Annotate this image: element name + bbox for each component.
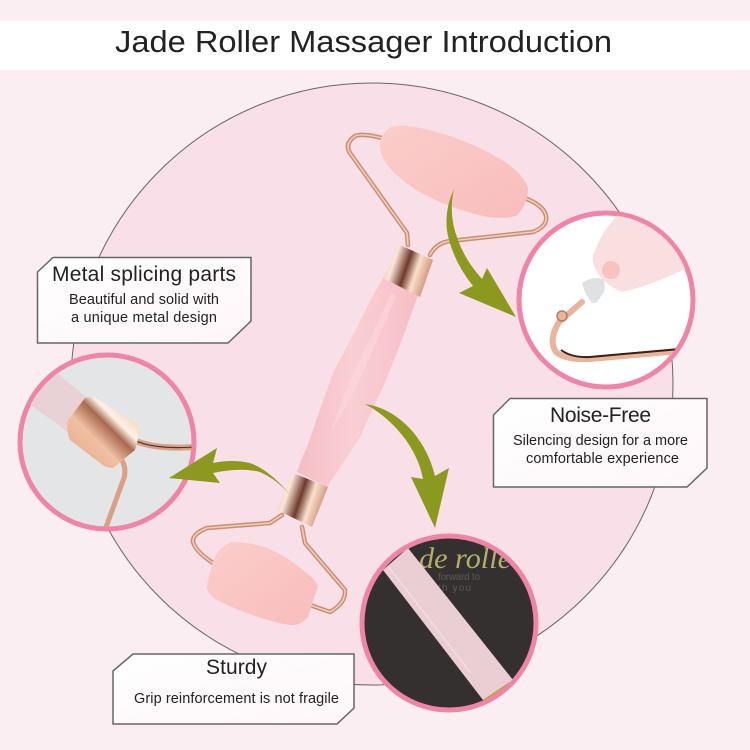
detail circle: sturdy handle: th you xyxy=(438,583,471,594)
detail circle: sturdy handle xyxy=(362,536,536,710)
jade tip xyxy=(592,216,685,292)
top wire frame xyxy=(348,135,546,255)
wire xyxy=(553,302,680,359)
bottom wire frame xyxy=(193,515,345,612)
callout: sturdy: Sturdy xyxy=(206,656,268,679)
roller product xyxy=(193,126,546,625)
silicone spacer xyxy=(582,278,605,303)
arrow: noise-free xyxy=(446,189,516,317)
arrow: sturdy xyxy=(365,404,449,528)
wire lower xyxy=(105,453,125,530)
top collar xyxy=(383,245,433,297)
collar xyxy=(67,397,139,468)
callout: noise-free xyxy=(494,398,707,487)
title band: Jade Roller Massager Introduction xyxy=(115,24,612,59)
spring clip xyxy=(557,311,567,321)
callout: noise-free: Noise-Free xyxy=(550,404,651,427)
background circle xyxy=(71,83,673,685)
callout: noise-free: Silencing design for a more xyxy=(513,433,688,449)
gold collar end xyxy=(483,682,510,700)
handle section xyxy=(28,373,87,432)
card lettering: de rolle xyxy=(419,542,511,575)
callout: sturdy: Grip reinforcement is not fragile xyxy=(134,691,339,707)
callout: metal splicing parts: Metal splicing parts xyxy=(52,263,236,286)
title band xyxy=(0,21,750,70)
wire upper xyxy=(130,438,195,448)
detail circle: metal splicing xyxy=(20,355,195,530)
detail circle: sturdy handle: forward to xyxy=(438,572,480,583)
callout: metal splicing parts xyxy=(38,258,251,343)
detail circle: noise-free spacer xyxy=(519,205,700,387)
bottom collar xyxy=(277,473,328,527)
top roller xyxy=(380,126,528,218)
handle xyxy=(297,278,418,487)
arrow: metal splicing xyxy=(169,448,293,498)
callout: metal splicing parts: a unique metal design xyxy=(71,310,217,326)
bottom roller xyxy=(207,542,318,625)
callout: sturdy xyxy=(113,654,354,724)
handle section xyxy=(383,548,513,700)
callout: noise-free: comfortable experience xyxy=(526,451,679,467)
callout: metal splicing parts: Beautiful and solid with xyxy=(69,292,219,308)
